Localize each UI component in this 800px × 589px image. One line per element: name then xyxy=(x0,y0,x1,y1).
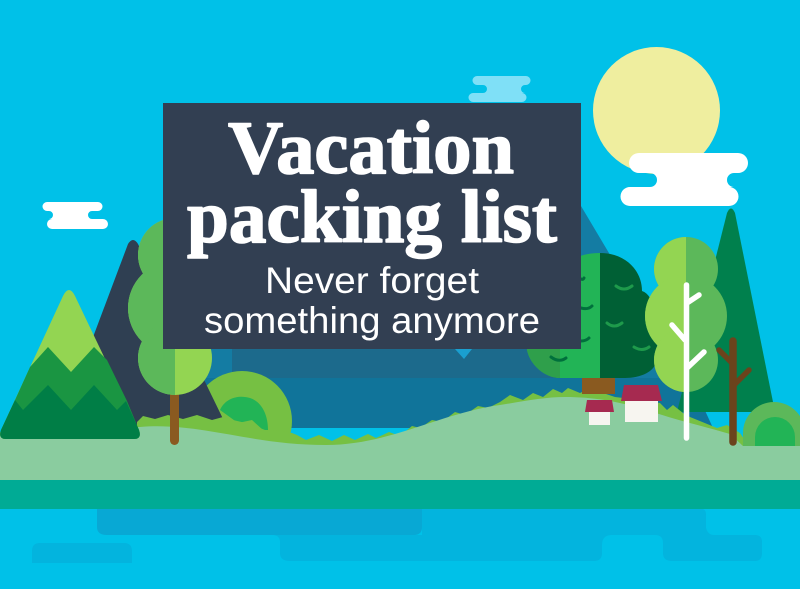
leaf marks xyxy=(551,278,649,360)
sun xyxy=(593,47,720,174)
title panel xyxy=(163,103,581,349)
large house xyxy=(621,385,662,422)
icon: pale blue cloud xyxy=(468,76,530,102)
right round tree with white trunk xyxy=(645,237,727,438)
subtitle: something anymore xyxy=(204,300,540,341)
left green mountain xyxy=(0,290,140,439)
heading: packing list xyxy=(187,176,557,259)
teal shoreline band xyxy=(0,480,800,509)
heading xyxy=(187,107,557,259)
dark tree trunk xyxy=(582,376,615,394)
zigzag grass band xyxy=(137,388,746,450)
small house xyxy=(585,400,614,425)
right round bush xyxy=(743,402,800,446)
brown bare tree xyxy=(719,341,749,442)
dark slate mountain xyxy=(60,240,226,425)
left round bush xyxy=(192,371,292,471)
ground hill xyxy=(0,397,800,480)
subtitle xyxy=(204,260,540,341)
subtitle: Never forget xyxy=(265,260,480,301)
tall conifer tree xyxy=(677,208,775,412)
heading: Vacation xyxy=(228,107,514,190)
dark green tree xyxy=(527,253,657,378)
blue mountain xyxy=(200,206,713,428)
icon: small white cloud xyxy=(42,202,108,229)
water patches xyxy=(32,509,762,563)
icon: large white cloud xyxy=(620,153,748,206)
left round tree xyxy=(128,220,212,445)
